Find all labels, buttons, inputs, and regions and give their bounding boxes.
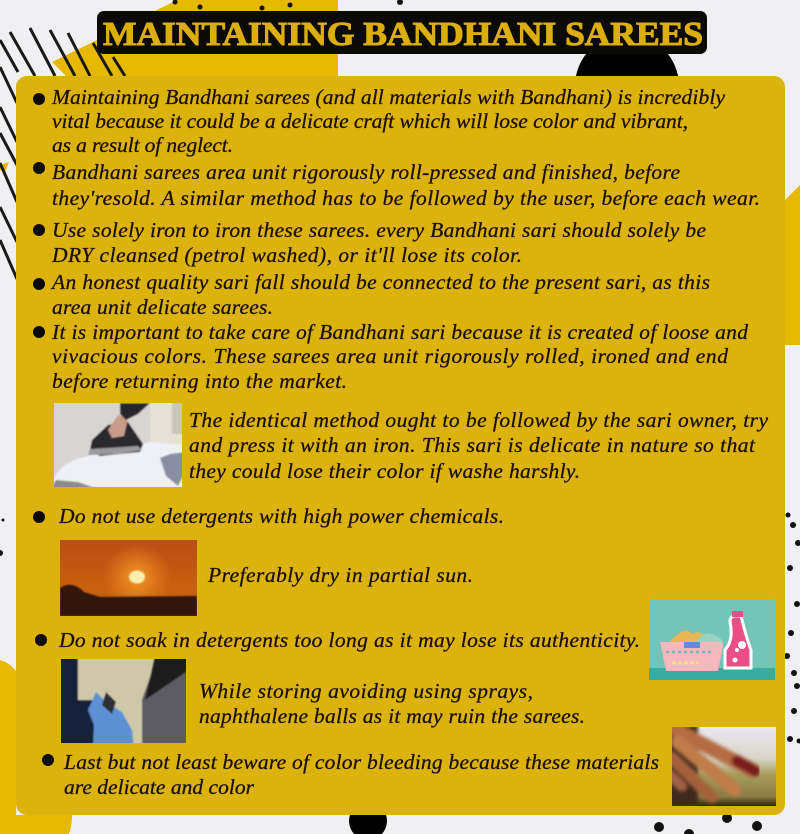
bullet: iron and dry clean: Use solely iron to iron these sarees. every Bandhani sari should solely be xyxy=(52,218,706,242)
text: dry in partial sun: Preferably dry in partial sun. xyxy=(207,563,473,587)
photo: ironing xyxy=(54,403,182,487)
text: storing: naphthalene balls as it may ruin the sarees. xyxy=(199,704,585,728)
text: storing xyxy=(199,679,585,728)
bullet: take care: before returning into the market. xyxy=(52,369,347,393)
bullet: sari fall: area unit delicate sarees. xyxy=(52,295,273,319)
bullet: take care xyxy=(33,320,748,393)
bullet: color bleeding xyxy=(42,750,659,799)
bullet list: intro: vital because it could be a delicate craft which will lose color and vibrant, xyxy=(52,109,688,133)
bullet list: intro: Maintaining Bandhani sarees (and all materials with Bandhani) is incredibly xyxy=(51,85,725,109)
text: identical method: they could lose their color if washe harshly. xyxy=(189,459,580,483)
text: identical method xyxy=(189,408,768,483)
bullet: iron and dry clean: DRY cleansed (petrol washed), or it'll lose its color. xyxy=(51,243,522,267)
photo: sunset xyxy=(60,540,197,616)
bullet list: intro: as a result of neglect. xyxy=(52,133,233,157)
photo: aerosol spray xyxy=(61,659,186,743)
bullet: sari fall: An honest quality sari fall should be connected to the present sari, as this xyxy=(50,270,710,294)
bullet: roll-pressed: they'resold. A similar method has to be followed by the user, before each wear. xyxy=(52,186,760,210)
text: storing: While storing avoiding using sprays, xyxy=(199,679,533,703)
text: identical method: The identical method ought to be followed by the sari owner, try xyxy=(189,408,768,432)
bullet: color bleeding: Last but not least beware of color bleeding because these materials xyxy=(63,750,659,774)
bullet: take care: It is important to take care of Bandhani sari because it is created of loose and xyxy=(51,320,748,344)
bullet: sari fall xyxy=(33,270,710,319)
bullet: soak: Do not soak in detergents too long as it may lose its authenticity. xyxy=(58,628,640,652)
bullet: iron and dry clean xyxy=(33,218,706,267)
text: identical method: and press it with an iron. This sari is delicate in nature so that xyxy=(189,433,756,457)
icon: laundry basket and detergent xyxy=(649,599,775,680)
title banner: MAINTAINING BANDHANI SAREES xyxy=(103,16,703,53)
bullet: take care: vivacious colors. These sarees area unit rigorously rolled, ironed and end xyxy=(52,344,728,368)
bullet: detergents: Do not use detergents with high power chemicals. xyxy=(58,504,504,528)
photo: stained fingers xyxy=(672,727,776,806)
bullet: roll-pressed xyxy=(33,160,760,210)
stripes xyxy=(0,28,125,279)
bullet list: intro xyxy=(33,85,725,157)
bullet: roll-pressed: Bandhani sarees area unit rigorously roll-pressed and finished, before xyxy=(52,160,680,184)
bullet: color bleeding: are delicate and color xyxy=(64,775,255,799)
